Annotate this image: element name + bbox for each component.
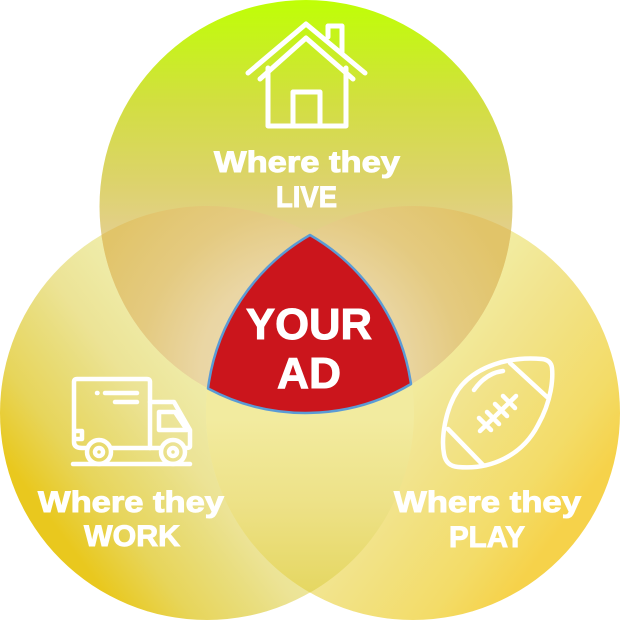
panel: where they work circle [0,206,414,620]
label: where they play [394,486,581,554]
overlap: live with work and play [102,206,511,388]
your ad text: AD [277,349,341,398]
label: where they play: PLAY [449,521,525,554]
label: where they work: Where they [38,486,224,519]
panel: where they play circle [206,206,620,620]
label: where they live [214,146,400,214]
your ad text: YOUR [246,300,372,349]
panel: where they live circle [100,0,512,413]
label: where they live: Where they [214,146,400,179]
label: where they play: Where they [394,486,581,519]
icon: house [248,24,365,126]
label: where they work: WORK [84,520,180,553]
overlap: work and play lens [206,233,414,593]
icon: delivery truck [73,379,190,464]
label: where they live: LIVE [276,181,337,214]
your ad centre shape [208,235,411,413]
label: where they work [38,486,224,553]
icon: football [443,358,552,467]
your ad text [246,300,372,398]
